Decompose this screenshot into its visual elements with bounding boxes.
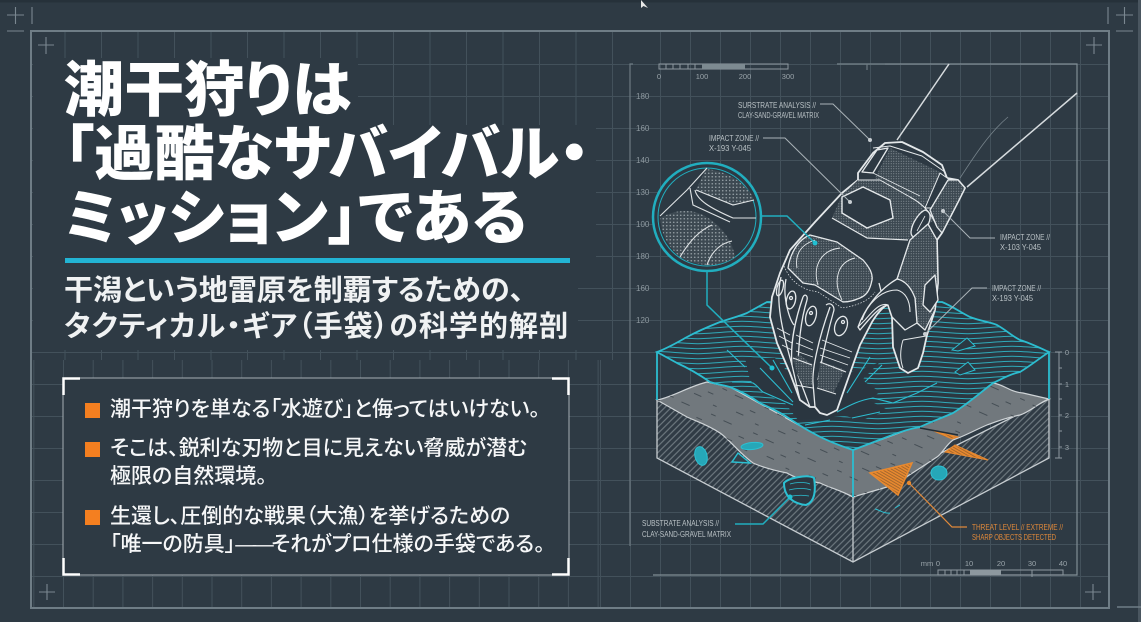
title: 「過酷なサバイバル・ [64, 121, 589, 188]
water column edges [657, 352, 1049, 497]
bottom millimetre scale: mm [921, 559, 933, 568]
annotation labels: IMPACT ZONE // [1000, 233, 1051, 242]
buried shells [784, 476, 815, 505]
top scale bar: 300 [782, 72, 794, 81]
panel frame with corner brackets [62, 377, 570, 576]
threat callout [907, 481, 1064, 542]
top scale bar [657, 64, 794, 81]
left ruler numbers: 130 [636, 188, 650, 197]
magnified lower mesh panel [660, 211, 735, 265]
left ruler numbers: 140 [636, 156, 650, 165]
magnified line work [660, 168, 756, 265]
bottom millimetre scale: 30 [1028, 559, 1036, 568]
bottom millimetre scale: 0 [936, 559, 940, 568]
bullet text: 極限の自然環境。 [110, 465, 267, 488]
annotation labels: CLAY-SAND-GRAVEL MATRIX [642, 530, 732, 539]
left ruler numbers: 120 [636, 316, 650, 325]
bullet text [110, 505, 545, 556]
left ruler numbers: 160 [636, 284, 650, 293]
finger separators [779, 277, 800, 400]
left ruler numbers: 160 [636, 124, 650, 133]
bullet 1 [85, 398, 540, 421]
bullet marker [85, 442, 100, 457]
bullet marker [85, 510, 100, 525]
bullet marker [85, 403, 100, 418]
annotation labels: IMPACT ZONE // [709, 134, 760, 143]
knuckle guard [788, 235, 872, 302]
arm outline [897, 64, 1077, 187]
orange sharp fragments [870, 463, 912, 495]
label leader lines [763, 104, 995, 336]
subtitle: 干潟という地雷原を制覇するための、 [64, 275, 524, 307]
cuff lines and dark strip [925, 173, 950, 208]
depth scale: 1 [1065, 380, 1069, 389]
top scale bar: 200 [739, 72, 751, 81]
threat callout: THREAT LEVEL // EXTREME // [972, 523, 1064, 532]
left ruler numbers: 100 [636, 220, 650, 229]
title: 潮干狩りは [64, 57, 351, 124]
side vent [911, 210, 930, 237]
depth scale: 0 [1065, 348, 1069, 357]
bullet text: そこは、鋭利な刃物と目に見えない脅威が潜む [110, 437, 527, 460]
title [64, 57, 589, 252]
bullet text: 「唯一の防具」―― それがプロ仕様の手袋である。 [110, 533, 545, 556]
annotation labels: IMPACT ZONE // [992, 284, 1042, 293]
left ruler numbers: 180 [636, 92, 650, 101]
depth scale: 3 [1065, 443, 1069, 452]
annotation labels: CLAY-SAND-GRAVEL MATRIX [738, 111, 819, 120]
right palm mesh [897, 224, 938, 330]
bullet 2 [85, 436, 527, 488]
cyan callout connectors [707, 216, 818, 524]
annotation labels: SUBSTRATE ANALYSIS // [642, 519, 720, 528]
subtitle [64, 275, 569, 343]
annotation labels: X-103 Y-045 [1000, 243, 1042, 252]
dark crack around fingertips [745, 358, 888, 420]
cyan heading rule [65, 258, 570, 263]
cuff mesh [875, 148, 942, 210]
bottom millimetre scale [921, 559, 1067, 577]
left ruler numbers [636, 92, 650, 325]
depth scale: 2 [1065, 411, 1069, 420]
annotation labels: X-193 Y-045 [709, 144, 752, 153]
thumb [858, 290, 910, 327]
panel: key points [62, 377, 570, 576]
back of hand mesh [832, 180, 935, 240]
bottom millimetre scale: 10 [965, 559, 973, 568]
drawing frame and rulers [630, 64, 1077, 575]
magnified detail callout [653, 163, 761, 271]
thumb fold fill [858, 279, 917, 330]
tactical glove [770, 142, 965, 415]
title: ミッション」である [64, 185, 527, 252]
depth scale [1055, 348, 1069, 458]
annotation labels [642, 101, 1051, 539]
bullet text: 生還し、圧倒的な戦果（大漁）を挙げるための [110, 505, 510, 528]
water surface [657, 302, 1049, 450]
wrist wrap [930, 180, 965, 233]
fingertip mesh [793, 355, 813, 386]
hatched soil sides [657, 399, 1049, 562]
top scale bar: 0 [657, 72, 661, 81]
glove silhouette [770, 142, 965, 415]
annotation labels: SURSTRATE ANALYSIS // [738, 101, 817, 110]
bullet text: 潮干狩りを単なる「水遊び」と侮ってはいけない。 [110, 398, 540, 421]
magnified upper mesh panel [696, 169, 754, 205]
annotation labels: X-193 Y-045 [992, 294, 1034, 303]
bottom millimetre scale: 20 [997, 559, 1005, 568]
bottom millimetre scale: 40 [1059, 559, 1067, 568]
finger ribs [777, 328, 852, 365]
top scale bar: 100 [696, 72, 708, 81]
hex armour plate [842, 187, 893, 228]
left ruler numbers: 180 [636, 252, 650, 261]
bullet text [110, 436, 527, 488]
subtitle: タクティカル・ギア（手袋）の科学的解剖 [64, 311, 569, 343]
sand surface [657, 382, 1049, 497]
isometric substrate block [657, 302, 1049, 562]
bullet 3 [85, 505, 545, 556]
threat callout: SHARP OBJECTS DETECTED [972, 533, 1056, 542]
knuckle rivets [775, 279, 785, 297]
